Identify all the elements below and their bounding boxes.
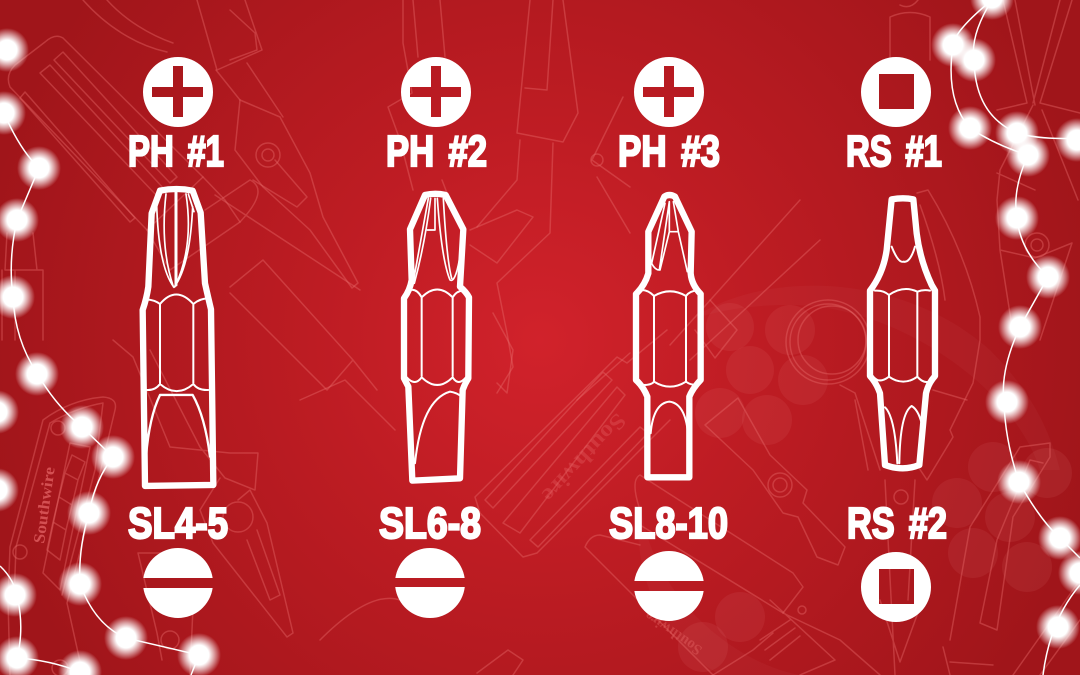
column: PH #1 top — [128, 57, 224, 176]
ghost: screwdriver upper left — [8, 0, 360, 290]
column: RS #2 bottom — [847, 499, 947, 622]
column: PH #2 top — [386, 57, 487, 176]
ghost: multitool lower left — [8, 397, 116, 675]
ghost: brand wordmark center: Southwire — [537, 409, 632, 508]
label: SL8-10: SL8-10 — [609, 499, 728, 548]
ghost: translucent discs and swirl — [638, 286, 1072, 675]
bit: PH #1 / SL4-5 — [143, 189, 213, 486]
label: RS #1: RS #1 — [846, 127, 942, 176]
icon: Robertson square 2 — [861, 552, 931, 622]
icon: Phillips head 2 — [401, 57, 471, 127]
label: RS #2: RS #2 — [847, 499, 947, 548]
icon: slotted head 8-10 — [634, 551, 704, 621]
label: PH #1: PH #1 — [128, 127, 224, 176]
ghost: cutting pliers upper left — [216, 10, 377, 390]
bit: RS #1 / RS #2 — [870, 198, 935, 468]
icon: slotted head 6-8 — [395, 548, 465, 618]
icon: Phillips head 1 — [143, 57, 213, 127]
ghost: right side tools and ring — [786, 0, 1080, 675]
column: PH #3 top — [618, 57, 720, 176]
column: RS #1 top — [846, 57, 942, 176]
bit: PH #3 / SL8-10 — [636, 195, 701, 477]
icon: Robertson square 1 — [861, 57, 931, 127]
ghost: central pliers — [300, 0, 630, 675]
column: SL6-8 bottom — [379, 499, 481, 618]
label: PH #2: PH #2 — [386, 127, 487, 176]
bit: PH #2 / SL6-8 — [404, 194, 469, 481]
ghost: bit on left edge — [2, 233, 43, 340]
label: SL4-5: SL4-5 — [128, 499, 228, 548]
column: SL4-5 bottom — [128, 499, 228, 618]
ghost: brand wordmark lower: Southwire — [642, 607, 705, 658]
ghost: lower multitool and pliers — [585, 300, 880, 675]
label: PH #3: PH #3 — [618, 127, 720, 176]
ghost: central screwdriver with brand name — [475, 200, 820, 557]
column: SL8-10 bottom — [609, 499, 728, 621]
label: SL6-8: SL6-8 — [379, 499, 481, 548]
ghost: brand wordmark left: Southwire — [31, 466, 59, 545]
icon: Phillips head 3 — [634, 57, 704, 127]
icon: slotted head 4-5 — [143, 548, 213, 618]
ghost: pliers beside SL4-5 — [113, 340, 293, 675]
